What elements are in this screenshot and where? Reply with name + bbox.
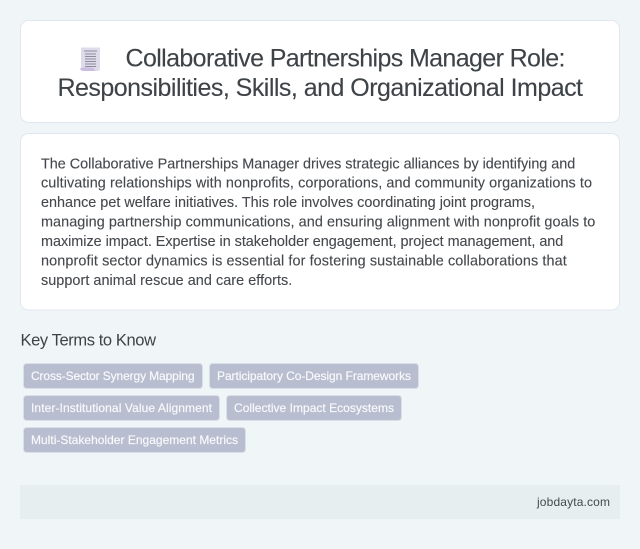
tag: inter-institutional value alignment bbox=[24, 396, 220, 420]
tag: collective impact ecosystems: Collective Impact Ecosystems bbox=[234, 401, 394, 415]
tag: participatory co-design frameworks bbox=[210, 364, 418, 388]
tag: participatory co-design frameworks: Participatory Co-Design Frameworks bbox=[217, 369, 411, 383]
description text: support animal rescue and care efforts. bbox=[41, 273, 292, 289]
tag: cross-sector synergy mapping: Cross-Sector Synergy Mapping bbox=[31, 369, 194, 383]
tag: collective impact ecosystems bbox=[226, 396, 402, 420]
description text: cultivating relationships with nonprofits, corporations, and community organizations to bbox=[41, 176, 592, 192]
title bbox=[58, 45, 583, 102]
description text: The Collaborative Partnerships Manager drives strategic alliances by identifying and bbox=[41, 156, 575, 172]
icon: scroll document bbox=[80, 48, 100, 71]
description text: maximize impact. Expertise in stakeholder engagement, project management, and bbox=[41, 234, 563, 250]
tag: multi-stakeholder engagement metrics: Multi-Stakeholder Engagement Metrics bbox=[31, 433, 238, 447]
footer bar bbox=[20, 485, 620, 519]
description text: nonprofit sector dynamics is essential for fostering sustainable collaborations that bbox=[41, 253, 567, 269]
title: Responsibilities, Skills, and Organizational Impact bbox=[58, 74, 583, 102]
heading: key terms: Key Terms to Know bbox=[20, 332, 156, 350]
tag: cross-sector synergy mapping bbox=[24, 364, 202, 388]
description text bbox=[41, 156, 595, 289]
tag: multi-stakeholder engagement metrics bbox=[24, 428, 246, 452]
description text: enhance pet welfare initiatives. This role involves coordinating joint programs, bbox=[41, 195, 535, 211]
description text: managing partnership communications, and ensuring alignment with nonprofit goals to bbox=[41, 214, 595, 230]
panel: description card bbox=[20, 134, 620, 310]
footer bar: jobdayta.com bbox=[536, 495, 610, 509]
title: Collaborative Partnerships Manager Role: bbox=[126, 45, 566, 73]
panel: title card bbox=[20, 20, 620, 122]
tag: inter-institutional value alignment: Inter-Institutional Value Alignment bbox=[31, 401, 213, 415]
